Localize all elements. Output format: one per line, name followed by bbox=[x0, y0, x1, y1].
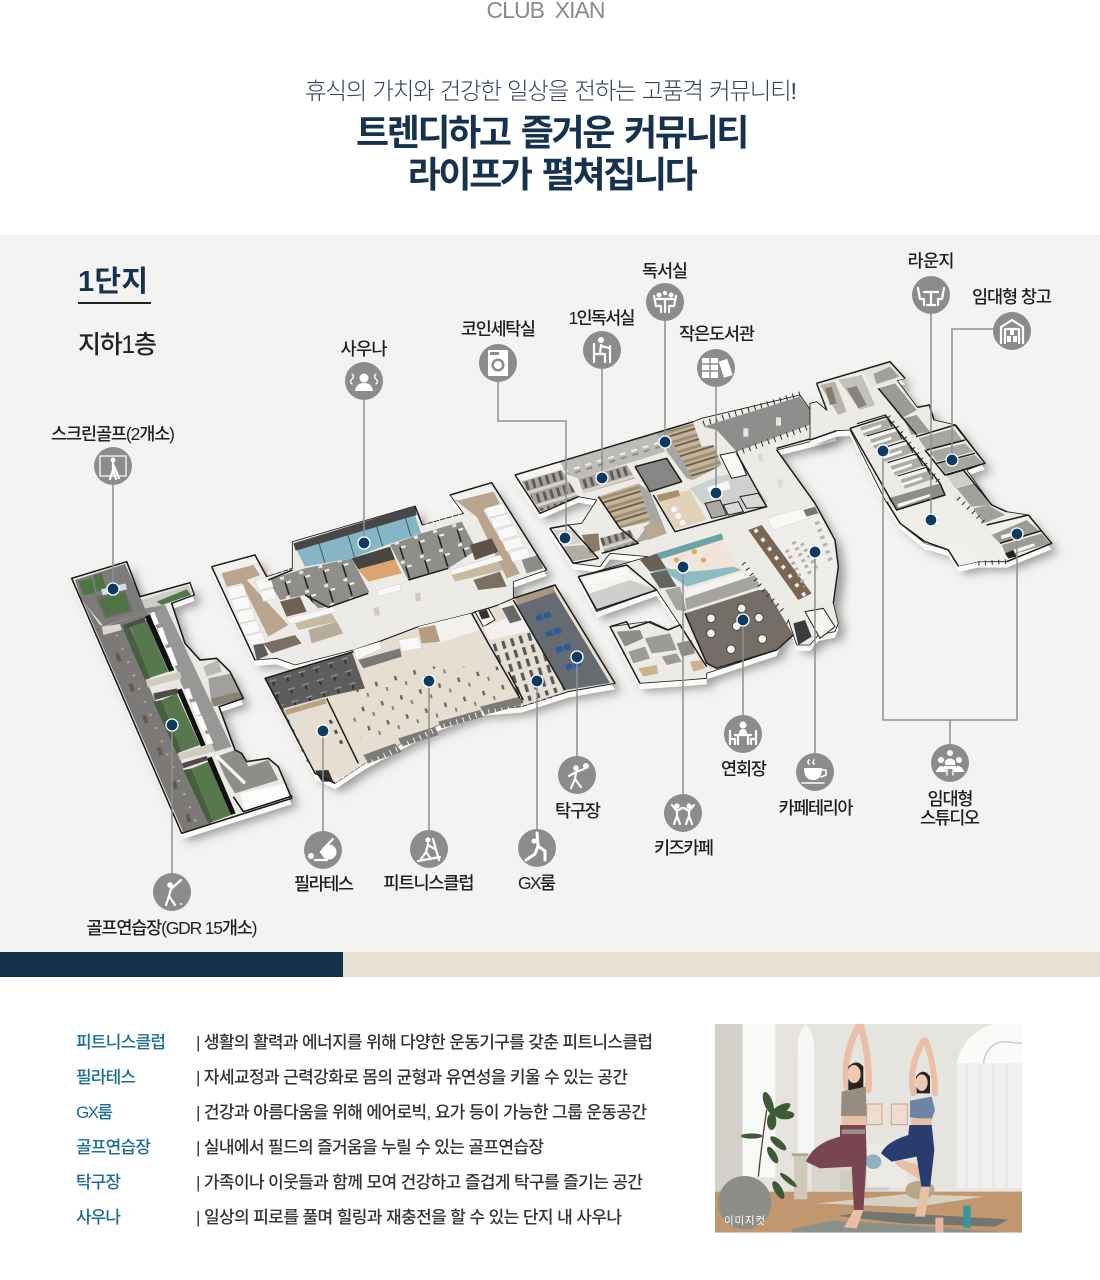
icon: reading room bbox=[646, 283, 684, 321]
label: gx room: GX룸 bbox=[518, 873, 556, 893]
text block: facility descriptions: | 자세교정과 근력강화로 몸의 균형과 유연성을 키울 수 있는 공간 bbox=[196, 1068, 628, 1087]
leader lines bbox=[113, 314, 1017, 874]
panel: floor plan background bbox=[0, 235, 1100, 952]
label: rental studio: 스튜디오 bbox=[920, 808, 980, 828]
text block: facility descriptions: | 가족이나 이웃들과 함께 모여 건강하고 즐겁게 탁구를 즐기는 공간 bbox=[196, 1173, 643, 1192]
icon: gx room bbox=[518, 829, 556, 867]
icon: table tennis bbox=[558, 756, 596, 794]
photo: yoga class bbox=[715, 1024, 1022, 1233]
bar: section divider bbox=[0, 952, 1100, 977]
icon: lounge bbox=[912, 276, 950, 314]
label: sauna: 사우나 bbox=[340, 339, 388, 359]
label: pilates: 필라테스 bbox=[294, 874, 354, 894]
floor plan: sauna block and atrium bbox=[212, 483, 553, 674]
label: screen golf: 스크린골프(2개소) bbox=[51, 424, 175, 444]
text block: facility descriptions: 피트니스클럽 bbox=[76, 1033, 166, 1052]
text block: facility descriptions bbox=[76, 1033, 653, 1227]
complex heading: 1단지 bbox=[78, 265, 148, 298]
text block: facility descriptions: 필라테스 bbox=[76, 1068, 136, 1087]
text block: facility descriptions: 골프연습장 bbox=[76, 1138, 151, 1157]
label: table tennis: 탁구장 bbox=[555, 801, 601, 821]
icon: private study bbox=[583, 331, 621, 369]
photo caption: 이미지컷 bbox=[724, 1215, 765, 1227]
icon: pilates bbox=[304, 831, 342, 869]
label: kids cafe: 키즈카페 bbox=[654, 838, 714, 858]
label: golf practice: 골프연습장(GDR 15개소) bbox=[86, 918, 258, 938]
location dots bbox=[107, 436, 1023, 737]
icon: screen golf bbox=[94, 447, 132, 485]
main heading: 라이프가 펼쳐집니다 bbox=[408, 154, 698, 195]
text block: facility descriptions: | 일상의 피로를 풀며 힐링과 재충전을 할 수 있는 단지 내 사우나 bbox=[196, 1208, 622, 1227]
icon: fitness club bbox=[410, 830, 448, 868]
text block: facility descriptions: | 실내에서 필드의 즐거움을 누릴 수 있는 골프연습장 bbox=[196, 1138, 544, 1157]
icon: small library bbox=[697, 349, 735, 387]
subtitle: 휴식의 가치와 건강한 일상을 전하는 고품격 커뮤니티! bbox=[305, 78, 797, 104]
floor heading: 지하1층 bbox=[78, 331, 157, 359]
main heading bbox=[356, 112, 747, 195]
label: cafeteria: 카페테리아 bbox=[778, 798, 854, 818]
main heading: 트렌디하고 즐거운 커뮤니티 bbox=[356, 112, 747, 153]
text block: facility descriptions: | 건강과 아름다움을 위해 에어로빅, 요가 등이 가능한 그룹 운동공간 bbox=[196, 1103, 647, 1122]
text block: facility descriptions: 탁구장 bbox=[76, 1173, 121, 1192]
icon: cafeteria bbox=[796, 753, 834, 791]
icon: coin laundry bbox=[479, 344, 517, 382]
label: private study: 1인독서실 bbox=[568, 308, 636, 328]
text block: facility descriptions: | 생활의 활력과 에너지를 위해 다양한 운동기구를 갖춘 피트니스클럽 bbox=[196, 1033, 653, 1052]
floor plan: central building bbox=[515, 394, 845, 692]
icon: sauna bbox=[345, 362, 383, 400]
label: fitness club: 피트니스클럽 bbox=[384, 873, 474, 893]
label: small library: 작은도서관 bbox=[679, 324, 755, 344]
label: lounge: 라운지 bbox=[908, 251, 954, 271]
icon: kids cafe bbox=[664, 794, 702, 832]
label: rental storage: 임대형 창고 bbox=[972, 287, 1052, 307]
floor plan: east building bbox=[810, 362, 1058, 575]
text block: facility descriptions: 사우나 bbox=[76, 1208, 121, 1227]
icon: rental storage bbox=[993, 312, 1031, 350]
label: reading room: 독서실 bbox=[642, 261, 688, 281]
text block: facility descriptions: GX룸 bbox=[76, 1103, 113, 1122]
label: coin laundry: 코인세탁실 bbox=[461, 319, 536, 339]
icon: banquet hall bbox=[724, 715, 762, 753]
icon: rental studio bbox=[931, 744, 969, 782]
label: banquet hall: 연회장 bbox=[721, 759, 767, 779]
label: rental studio: 임대형 bbox=[928, 789, 974, 809]
icon: golf practice bbox=[153, 873, 191, 911]
floor plan: golf building bbox=[72, 562, 298, 842]
label: rental studio bbox=[920, 789, 980, 828]
floor plan: fitness club, gx room and table tennis bbox=[265, 585, 622, 792]
